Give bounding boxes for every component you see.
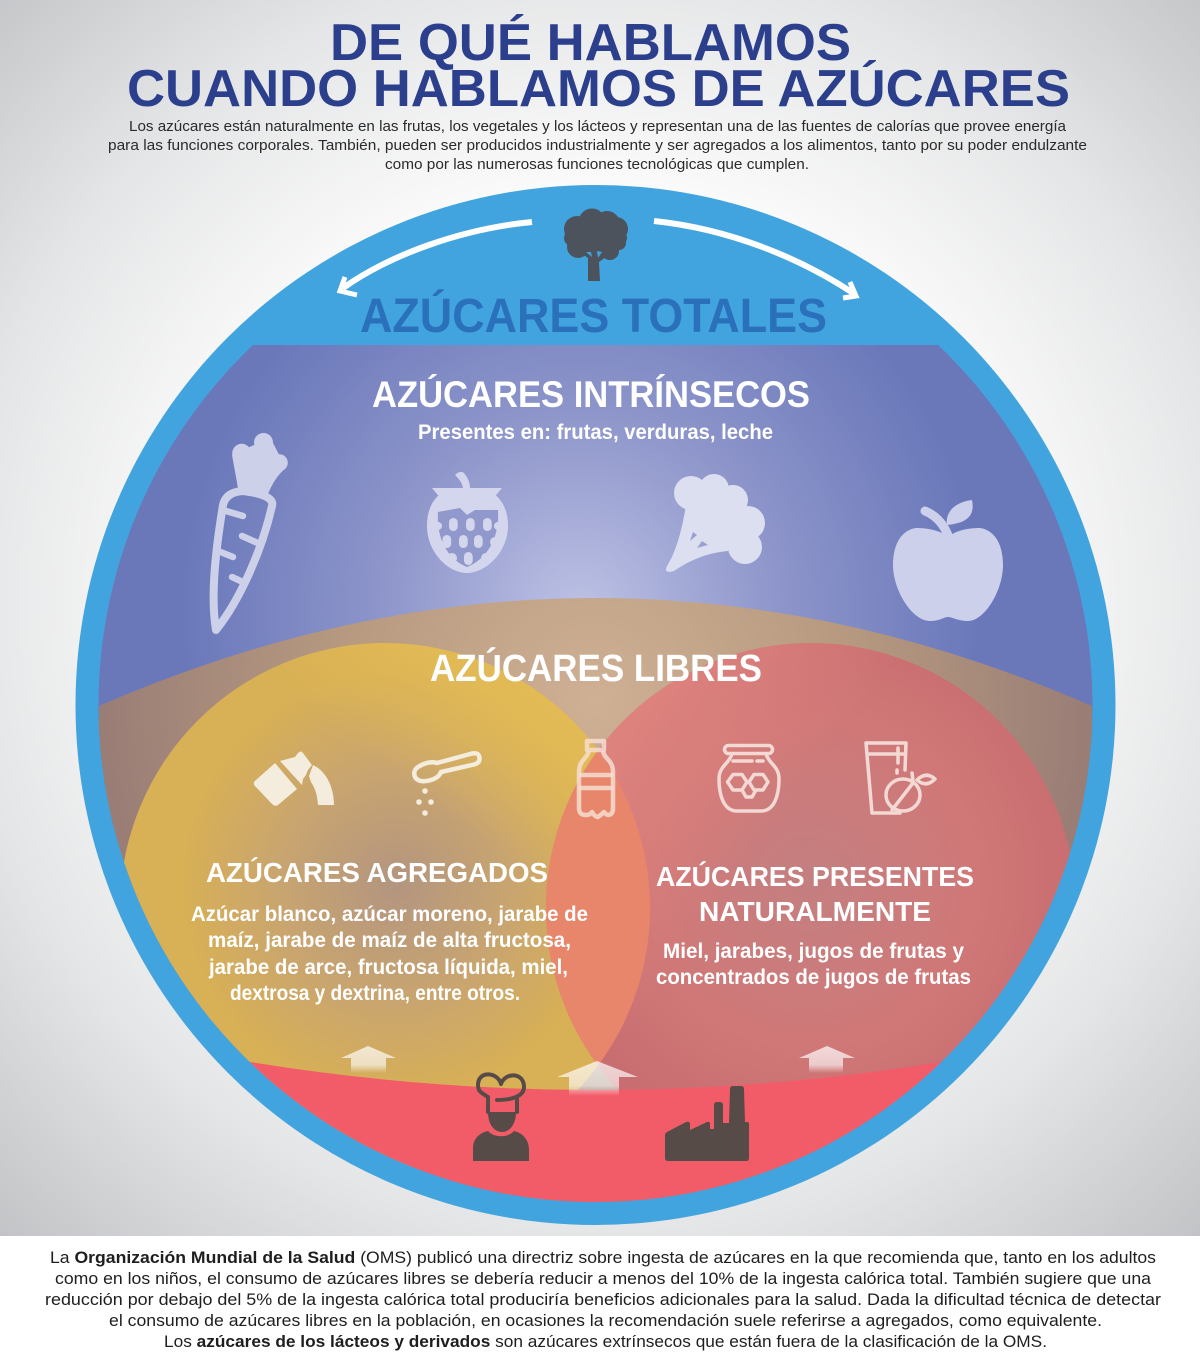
- inner circle regions: [90, 345, 1100, 1250]
- intro text: [108, 118, 1087, 173]
- panel text: azúcares agregados: maíz, jarabe de maíz de alta fructosa,: [208, 929, 571, 952]
- icon: strawberry: [427, 472, 508, 573]
- panel text: azúcares agregados: dextrosa y dextrina, entre otros.: [230, 982, 520, 1005]
- heading: azúcares intrínsecos: [372, 373, 810, 444]
- title: [127, 14, 1070, 118]
- panel text: azúcares presentes naturalmente: NATURALMENTE: [699, 896, 931, 927]
- icon: spoon: [414, 753, 480, 816]
- overlap of added and natural sugars: [546, 752, 650, 1065]
- icon: apple: [893, 500, 1003, 621]
- panel text: azúcares presentes naturalmente: concentrados de jugos de frutas: [656, 966, 971, 989]
- icon: tree: [564, 208, 628, 281]
- intro text: Los azúcares están naturalmente en las frutas, los vegetales y los lácteos y representan una de las fuentes de calorías que provee energía: [129, 118, 1067, 135]
- footer text: [45, 1248, 1161, 1351]
- icon: pouring bottle: [254, 752, 334, 806]
- arrow: up left: [341, 1046, 396, 1073]
- outer blue circle: azúcares totales: [76, 185, 1116, 1225]
- panel: sources band: [250, 1062, 941, 1202]
- footer text: como en los niños, el consumo de azúcares libres se debería reducir a menos del 10% de la ingesta calórica total. También sugiere que una: [55, 1269, 1152, 1288]
- intro text: para las funciones corporales. También, pueden ser producidos industrialmente y ser agregados a los alimentos, tanto por su poder endulzante: [108, 137, 1087, 154]
- footer text: Los azúcares de los lácteos y derivados son azúcares extrínsecos que están fuera de la clasificación de la OMS.: [164, 1332, 1047, 1351]
- heading: azúcares intrínsecos: AZÚCARES INTRÍNSECOS: [372, 373, 810, 415]
- icon: chef: [473, 1074, 529, 1161]
- panel: azúcares presentes naturalmente: [546, 643, 1076, 1173]
- icon: honey jar: [719, 746, 779, 811]
- heading: azúcares libres: AZÚCARES LIBRES: [430, 646, 762, 690]
- panel text: azúcares agregados: [191, 857, 588, 1005]
- panel text: azúcares agregados: Azúcar blanco, azúcar moreno, jarabe de: [191, 903, 588, 926]
- icon: carrot: [214, 433, 288, 630]
- panel text: azúcares agregados: AZÚCARES AGREGADOS: [206, 857, 548, 888]
- panel: azúcares intrínsecos: [90, 345, 1100, 845]
- panel: azúcares libres: [90, 598, 1100, 1210]
- panel: azúcares agregados: [124, 643, 598, 1170]
- intro text: como por las numerosas funciones tecnológicas que cumplen.: [385, 156, 809, 173]
- panel text: azúcares agregados: jarabe de arce, fructosa líquida, miel,: [208, 956, 568, 979]
- heading: azúcares intrínsecos: Presentes en: frutas, verduras, leche: [418, 421, 773, 444]
- icon: broccoli: [666, 474, 765, 572]
- title: CUANDO HABLAMOS DE AZÚCARES: [127, 60, 1070, 118]
- arrow: up center: [557, 1061, 638, 1096]
- panel text: azúcares presentes naturalmente: [656, 861, 974, 989]
- panel text: azúcares presentes naturalmente: AZÚCARES PRESENTES: [656, 861, 974, 892]
- icon: bottle: [579, 741, 613, 817]
- bottom white band: [0, 1236, 1200, 1372]
- arrow: left: [340, 222, 532, 295]
- icon: juice glass: [866, 743, 935, 813]
- footer text: La Organización Mundial de la Salud (OMS) publicó una directriz sobre ingesta de azúcares en la que recomienda que, tanto en los adultos: [50, 1248, 1156, 1267]
- footer text: reducción por debajo del 5% de la ingesta calórica total produciría beneficios adicionales para la salud. Dada la dificultad técnica de detectar: [45, 1290, 1161, 1309]
- arrow: right: [654, 221, 856, 298]
- title: DE QUÉ HABLAMOS: [330, 14, 851, 72]
- icon: factory: [665, 1086, 749, 1161]
- arrow: up right: [799, 1046, 855, 1073]
- panel text: azúcares presentes naturalmente: Miel, jarabes, jugos de frutas y: [663, 940, 964, 963]
- heading: azúcares totales: AZÚCARES TOTALES: [360, 288, 827, 343]
- footer text: el consumo de azúcares libres en la población, en ocasiones la recomendación suele referirse a agregados, como equivalente.: [109, 1311, 1102, 1330]
